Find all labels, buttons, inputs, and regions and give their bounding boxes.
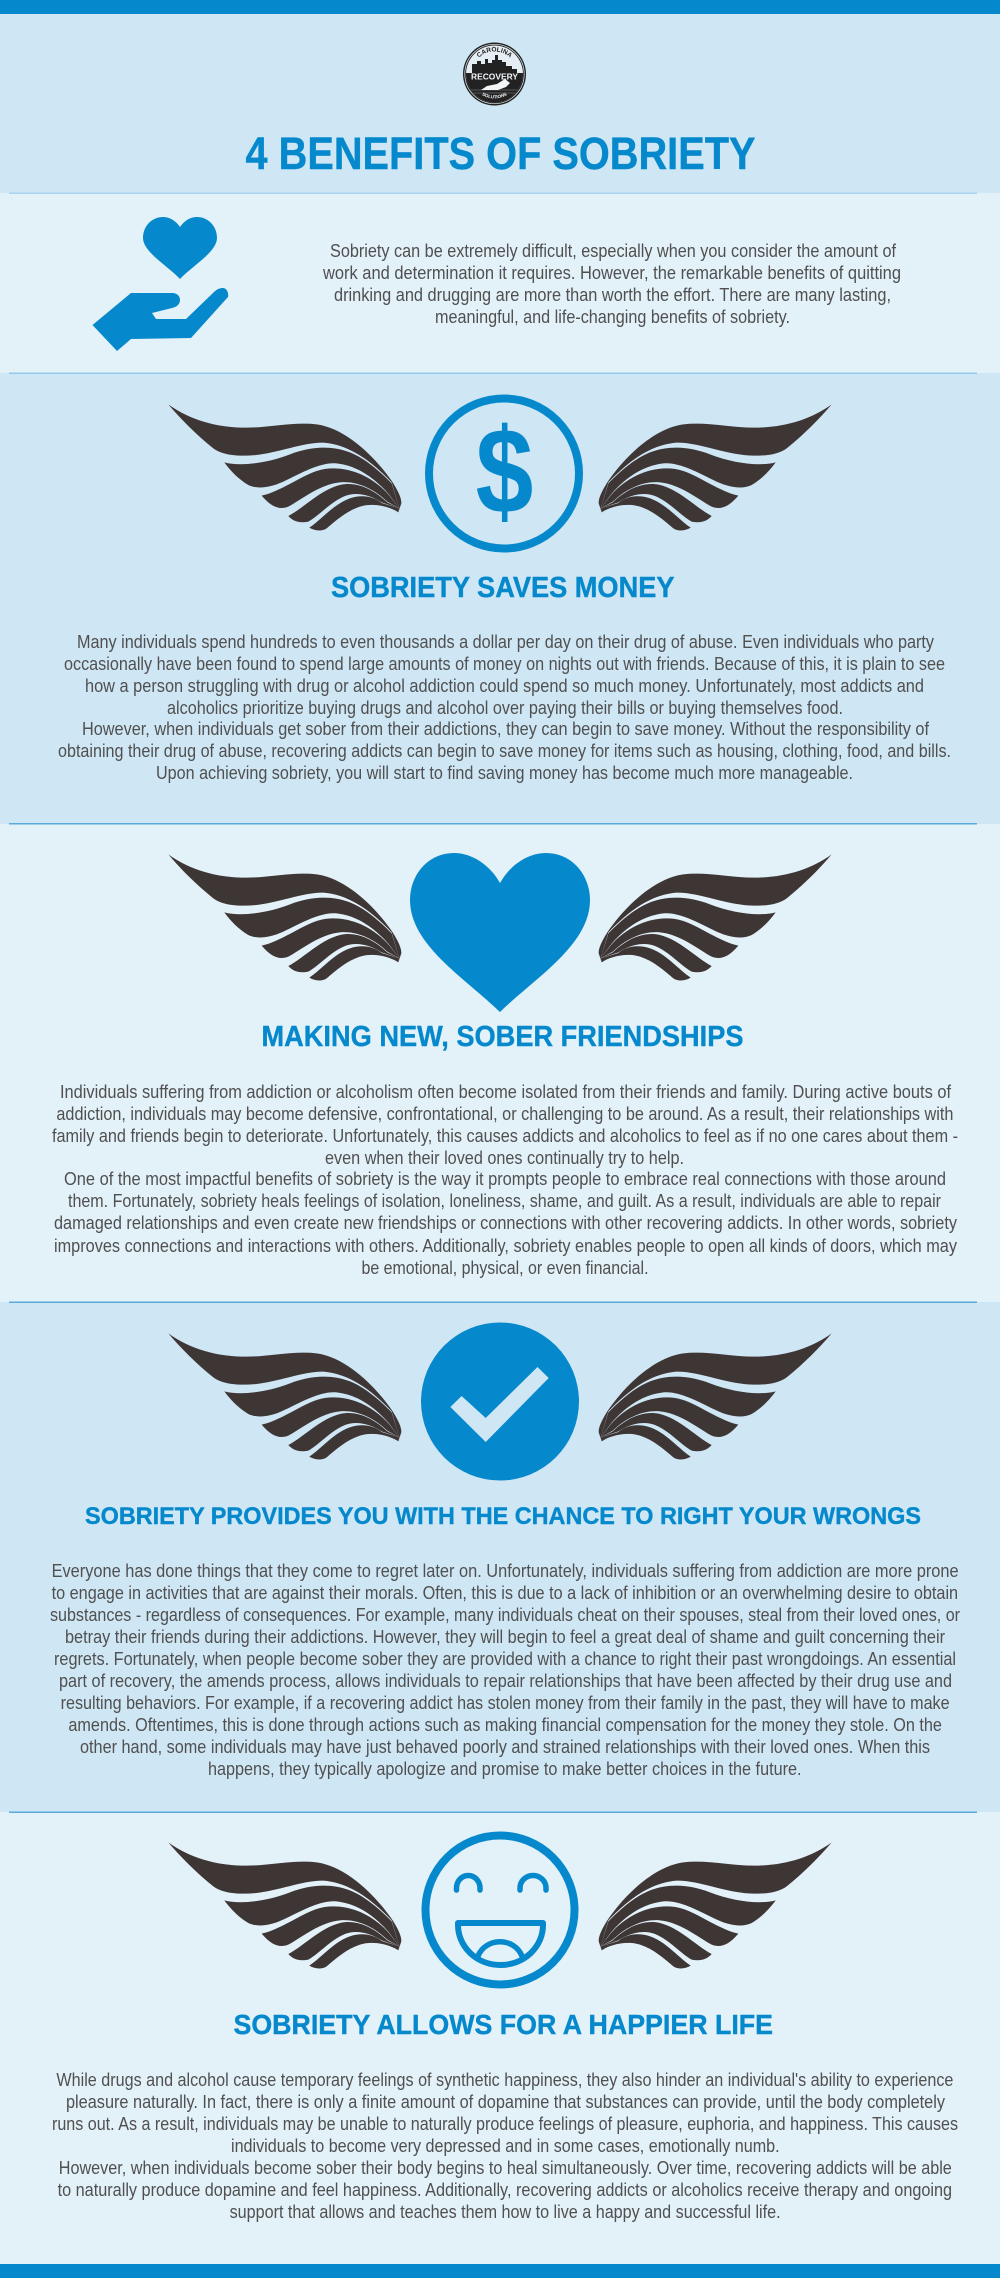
icon: Carolina Recovery logo bbox=[463, 42, 526, 106]
icon: right wing bbox=[599, 854, 832, 981]
body text: Upon achieving sobriety, you will start to find saving money has become much more manageable. bbox=[156, 763, 853, 783]
intro text: meaningful, and life-changing benefits of sobriety. bbox=[435, 307, 790, 327]
panel: happier life bbox=[0, 1812, 1000, 2264]
intro text: drinking and drugging are more than worth the effort. There are many lasting, bbox=[334, 285, 891, 305]
panel: new sober friendships bbox=[0, 824, 1000, 1302]
intro text: Sobriety can be extremely difficult, especially when you consider the amount of bbox=[330, 241, 897, 261]
heading: SOBRIETY ALLOWS FOR A HAPPIER LIFE bbox=[234, 2009, 773, 2040]
body text: how a person struggling with drug or alcohol addiction could spend so much money. Unfortunately, most addicts and bbox=[85, 676, 924, 696]
icon: dollar coin: $ bbox=[476, 403, 533, 539]
icon: left wing bbox=[168, 404, 401, 531]
panel: right your wrongs bbox=[0, 1302, 1000, 1812]
body text: alcoholics prioritize buying drugs and alcohol over paying their bills or buying themselves food. bbox=[167, 698, 843, 718]
body text: support that allows and teaches them how to live a happy and successful life. bbox=[230, 2202, 781, 2222]
intro text bbox=[322, 241, 901, 327]
body text bbox=[52, 2070, 958, 2222]
top bar bbox=[0, 0, 1000, 14]
body text: happens, they typically apologize and promise to make better choices in the future. bbox=[208, 1759, 802, 1779]
bottom bar bbox=[0, 2264, 1000, 2278]
heading: SOBRIETY SAVES MONEY bbox=[331, 572, 674, 604]
body text bbox=[50, 1561, 960, 1779]
body text: other hand, some individuals may have just behaved poorly and strained relationships with their loved ones. When this bbox=[80, 1737, 930, 1757]
body text bbox=[58, 632, 951, 783]
intro text: work and determination it requires. However, the remarkable benefits of quitting bbox=[322, 263, 901, 283]
panel: sobriety saves money bbox=[0, 373, 1000, 824]
icon: right wing bbox=[599, 1842, 832, 1969]
body text: even when their loved ones continually try to help. bbox=[325, 1148, 684, 1168]
body text: be emotional, physical, or even financial. bbox=[362, 1258, 648, 1278]
logo top text: CAROLINA bbox=[477, 46, 512, 58]
icon: right wing bbox=[599, 1333, 832, 1460]
body text: individuals to become very depressed and in some cases, emotionally numb. bbox=[231, 2136, 780, 2156]
body text bbox=[52, 1082, 958, 1278]
icon: dollar coin bbox=[429, 398, 579, 548]
panel: header bbox=[246, 42, 756, 179]
icon: smiling face bbox=[426, 1836, 574, 1984]
body text: However, when individuals get sober from their addictions, they can begin to save money. Without the responsibility of bbox=[82, 719, 930, 739]
icon: right wing bbox=[599, 404, 832, 531]
icon: left wing bbox=[168, 1842, 401, 1969]
icon: heart bbox=[410, 853, 590, 1012]
title: 4 BENEFITS OF SOBRIETY bbox=[246, 128, 756, 179]
panel: introduction bbox=[0, 193, 1000, 373]
icon: check mark circle bbox=[421, 1322, 579, 1480]
logo bottom text: SOLUTIONS bbox=[482, 92, 507, 98]
icon: left wing bbox=[168, 1333, 401, 1460]
heading: SOBRIETY PROVIDES YOU WITH THE CHANCE TO RIGHT YOUR WRONGS bbox=[85, 1503, 921, 1530]
icon: left wing bbox=[168, 854, 401, 981]
icon: heart above hand bbox=[92, 217, 228, 351]
logo band text: RECOVERY bbox=[471, 72, 518, 82]
heading: MAKING NEW, SOBER FRIENDSHIPS bbox=[262, 1021, 744, 1053]
